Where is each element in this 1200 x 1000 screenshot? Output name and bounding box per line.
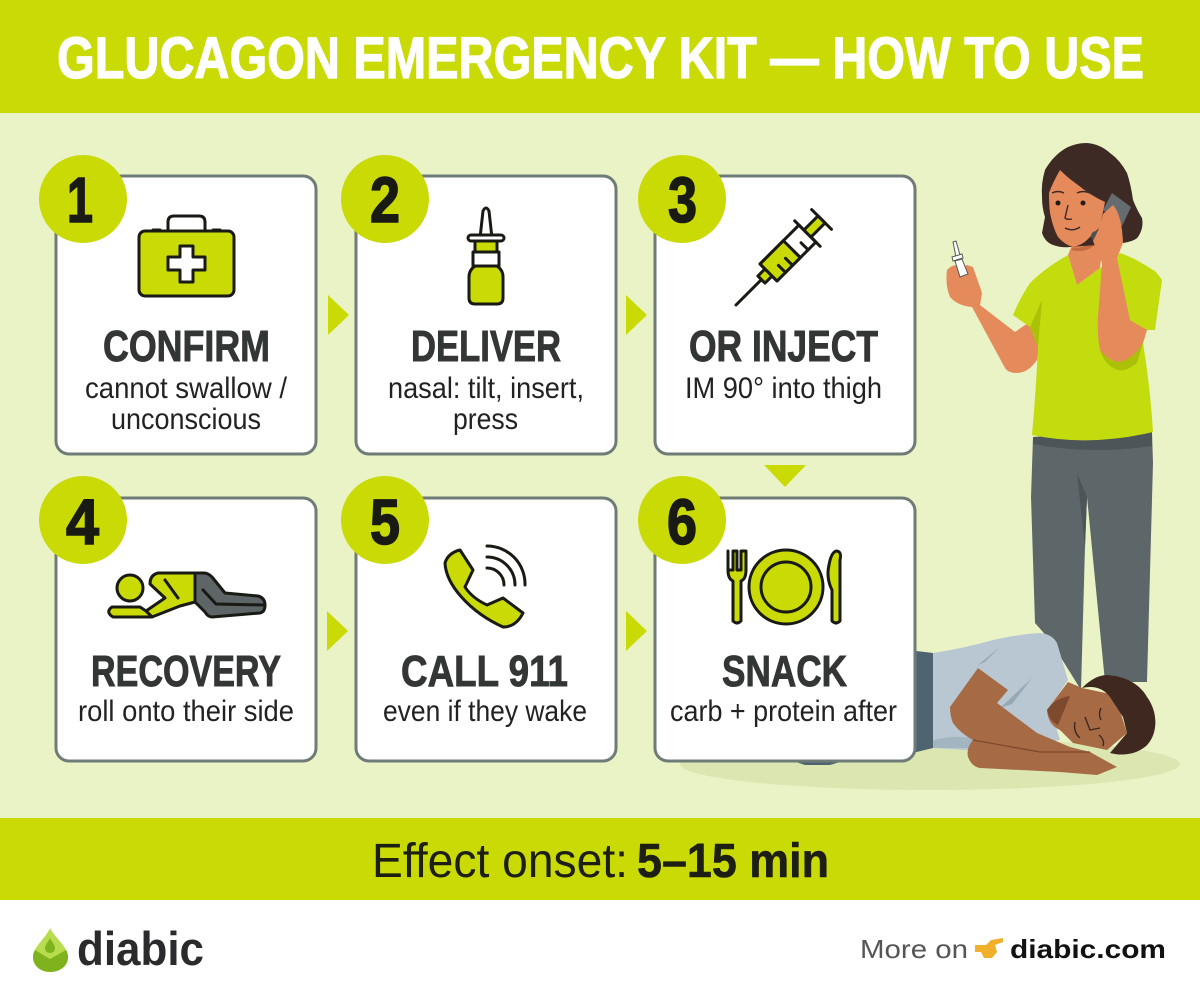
icon: green drop	[33, 928, 68, 972]
man's arm	[950, 668, 1117, 775]
step 6: snack	[638, 476, 915, 761]
description: carb + protein after	[670, 695, 897, 728]
man's trousers	[793, 649, 933, 765]
step 5: call 911	[341, 476, 616, 761]
number badge 4	[39, 476, 127, 564]
description	[85, 372, 288, 436]
description: roll onto their side	[78, 695, 294, 728]
icon: nasal spray	[468, 208, 504, 304]
number badge 2: 2	[370, 164, 400, 236]
man's neck and head	[1047, 682, 1127, 750]
step 2: deliver	[341, 155, 616, 454]
step 3: or inject	[638, 155, 915, 454]
neck	[1068, 225, 1105, 285]
floor shadow	[680, 738, 1180, 790]
number badge 2	[341, 155, 429, 243]
icon: first aid kit	[139, 216, 234, 296]
heading: RECOVERY	[91, 647, 281, 696]
background panel	[0, 113, 1200, 818]
illustration: man lying in recovery position	[793, 633, 1155, 775]
header banner	[0, 0, 1200, 113]
icon: syringe	[723, 207, 834, 318]
brand name: diabic	[77, 922, 204, 975]
facial features	[1052, 192, 1090, 230]
description: even if they wake	[383, 695, 587, 728]
icon: phone with signal waves	[445, 546, 525, 627]
arrows between steps	[327, 295, 806, 651]
number badge 5: 5	[370, 486, 400, 558]
face	[1049, 170, 1105, 247]
description: IM 90° into thigh	[685, 372, 882, 405]
step 4: recovery	[39, 476, 316, 761]
illustration: standing woman on phone with nasal spray	[946, 143, 1162, 690]
icon: person in recovery position	[109, 573, 265, 617]
number badge 3: 3	[668, 164, 697, 236]
description: unconscious	[111, 403, 261, 436]
icon: pointing hand	[975, 938, 1003, 958]
number badge 1: 1	[67, 164, 93, 236]
nasal spray bottle in hand	[952, 241, 968, 277]
man's shirt	[933, 633, 1068, 752]
onset value: 5–15 min	[637, 835, 829, 888]
heading: DELIVER	[411, 322, 561, 371]
hair	[1042, 143, 1142, 247]
description: press	[453, 403, 518, 436]
description: nasal: tilt, insert,	[388, 372, 584, 405]
onset label: Effect onset:	[372, 835, 628, 888]
step 1: confirm	[39, 155, 316, 454]
phone	[1103, 193, 1131, 226]
heading: SNACK	[722, 647, 847, 696]
number badge 3	[638, 155, 726, 243]
description	[388, 372, 584, 436]
shirt	[1013, 253, 1162, 440]
icon: plate, fork and knife	[728, 550, 840, 624]
footer link	[860, 934, 1166, 964]
trousers	[1031, 432, 1153, 690]
heading: OR INJECT	[689, 322, 878, 371]
man's facial features	[1075, 708, 1104, 746]
heading: CONFIRM	[103, 322, 270, 371]
footer link: diabic.com	[1010, 934, 1166, 964]
man's hair	[1082, 675, 1155, 755]
number badge 4: 4	[66, 486, 99, 558]
number badge 6	[638, 476, 726, 564]
footer logo	[33, 922, 204, 975]
description: cannot swallow /	[85, 372, 288, 405]
left arm and hand	[946, 265, 1040, 373]
footer link: More on	[860, 934, 968, 964]
effect onset banner	[0, 818, 1200, 900]
heading: CALL 911	[401, 647, 568, 696]
right arm holding phone	[1093, 205, 1147, 362]
number badge 5	[341, 476, 429, 564]
number badge 6: 6	[667, 486, 697, 558]
number badge 1	[39, 155, 127, 243]
